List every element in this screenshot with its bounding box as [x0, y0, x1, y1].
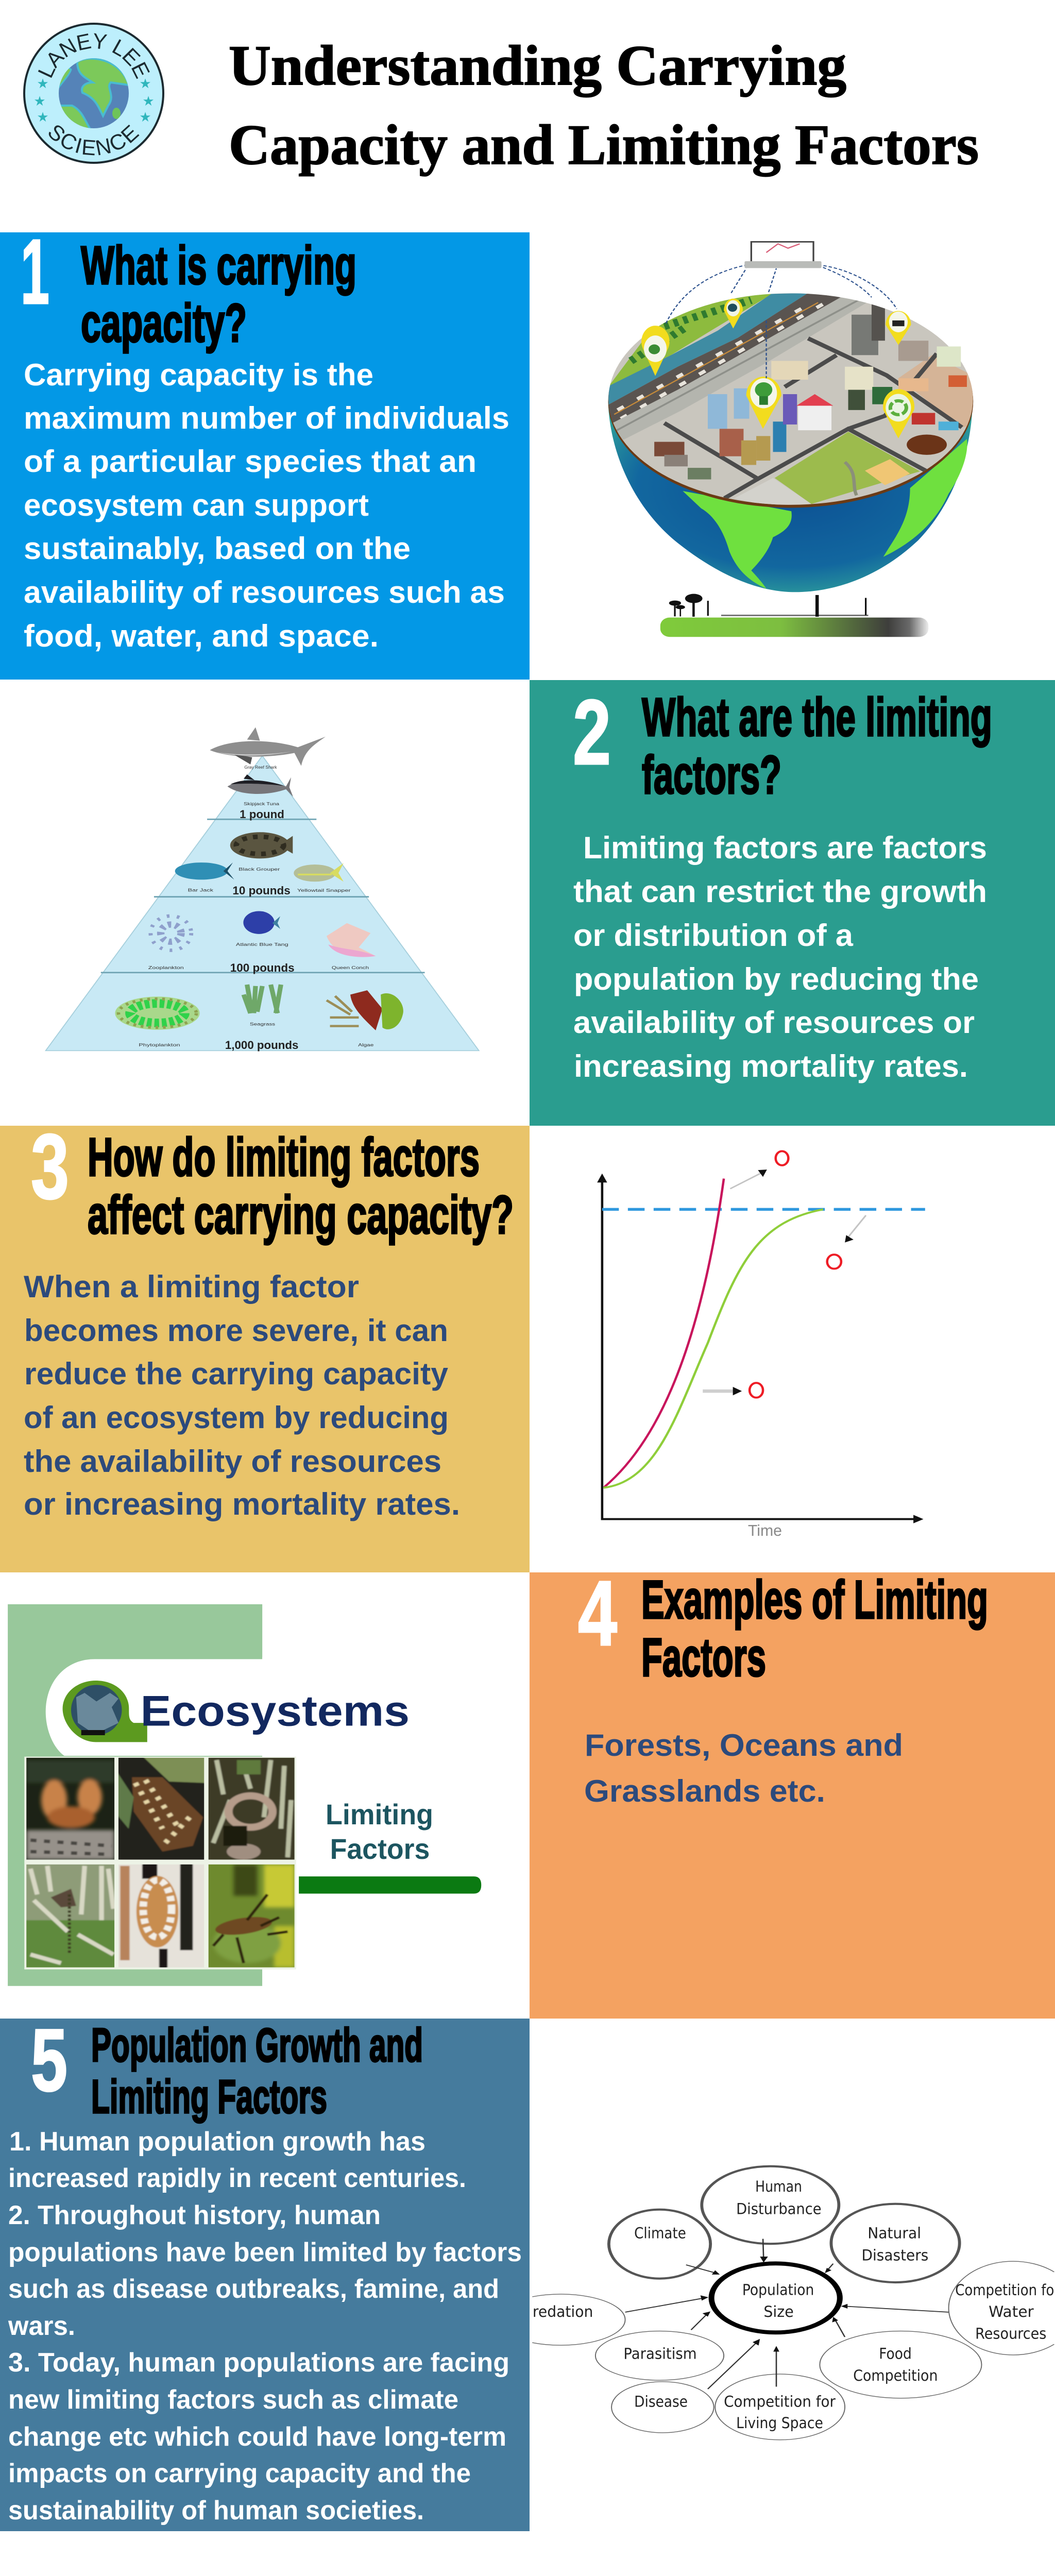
grouper	[230, 832, 293, 858]
pyramid body	[46, 756, 479, 1050]
diagram labels: Competition	[853, 2367, 938, 2384]
number 4: 4	[578, 1562, 617, 1665]
diagram labels: Disasters	[862, 2247, 928, 2264]
body text 3	[24, 1269, 460, 1521]
body text 1: availability of resources such as	[24, 575, 505, 609]
green river bank	[610, 294, 772, 385]
right beige zone	[898, 355, 979, 428]
photo: grasshopper on leaf	[207, 1862, 296, 1970]
illustration: earth with city on top	[598, 242, 979, 637]
body text 2: availability of resources or	[573, 1005, 975, 1040]
highway	[608, 293, 843, 424]
logo stars: ★	[37, 76, 49, 92]
heading 3	[88, 1127, 514, 1245]
body text 2	[573, 831, 987, 1083]
pyramid labels: Black Grouper	[239, 867, 280, 872]
panel 4: examples of limiting factors	[530, 1562, 1055, 2019]
number 1: 1	[21, 220, 49, 323]
diagram labels: Disturbance	[736, 2200, 822, 2218]
body text 1: maximum number of individuals	[24, 401, 509, 435]
logo stars: ★	[142, 94, 155, 109]
city disc surface	[598, 286, 979, 509]
heading 5: Limiting Factors	[91, 2071, 327, 2123]
heading 5: Population Growth and	[91, 2019, 423, 2072]
body text 4	[584, 1728, 903, 1808]
diagram labels: Food	[879, 2345, 912, 2363]
heading 4: Factors	[641, 1628, 766, 1688]
photo: red squirrels	[24, 1756, 117, 1861]
diagram labels: Water	[989, 2303, 1034, 2320]
body text 4: Forests, Oceans and	[585, 1728, 903, 1762]
body text 5: populations have been limited by factors	[8, 2238, 522, 2267]
pyramid labels: 100 pounds	[230, 962, 295, 975]
algae	[327, 990, 403, 1030]
illustration: ecosystems limiting factors slide	[8, 1604, 481, 1989]
diagram labels: Living Space	[736, 2415, 823, 2432]
chart: population growth curves with carrying capacity line	[597, 1151, 925, 1539]
diagram labels: redation	[533, 2303, 593, 2320]
body text 1: food, water, and space.	[24, 619, 379, 653]
slide green background	[8, 1604, 262, 1986]
ecosystem badge	[63, 1681, 147, 1742]
diagram labels: Competition for	[724, 2393, 836, 2411]
green bar	[299, 1876, 481, 1893]
axes	[602, 1179, 918, 1519]
logo globe	[57, 58, 129, 129]
photo: fritillary butterfly on white	[117, 1862, 207, 1970]
pyramid labels: 10 pounds	[232, 885, 291, 897]
pyramid labels: Algae	[358, 1043, 373, 1047]
title: Understanding Carrying	[229, 34, 846, 97]
photo: speckled butterfly	[117, 1756, 207, 1861]
panel 2: what are the limiting factors	[530, 680, 1055, 1126]
seagrass	[244, 985, 281, 1013]
elevated rail	[613, 297, 866, 440]
continents	[683, 491, 792, 589]
body text 3: or increasing mortality rates.	[24, 1487, 460, 1521]
logo stars	[33, 76, 155, 125]
body text 5: impacts on carrying capacity and the	[8, 2459, 471, 2488]
bar jack	[175, 862, 234, 879]
heading 1	[81, 235, 356, 353]
pyramid tier lines	[101, 819, 425, 973]
exponential curve	[604, 1179, 724, 1487]
pyramid labels: Phytoplankton	[139, 1043, 180, 1047]
body text 5: 3. Today, human populations are facing	[8, 2348, 509, 2378]
ground bar	[660, 618, 928, 637]
logo: Laney Lee Science badge	[23, 23, 164, 164]
body text 5: wars.	[8, 2311, 75, 2341]
body text 2: Limiting factors are factors	[583, 831, 987, 865]
river	[607, 293, 808, 405]
body text 2: that can restrict the growth	[573, 874, 987, 909]
limiting factors label	[326, 1799, 433, 1865]
arrows	[625, 2239, 948, 2389]
arrowheads	[701, 2257, 847, 2352]
body text 5: new limiting factors such as climate	[8, 2385, 458, 2415]
heading 5	[91, 2019, 423, 2123]
pyramid labels: Skipjack Tuna	[244, 802, 280, 806]
pyramid labels	[139, 765, 373, 1052]
limiting factors label: Limiting	[326, 1799, 433, 1831]
body text 5: 1. Human population growth has	[9, 2127, 426, 2157]
pyramid labels: Atlantic Blue Tang	[236, 942, 288, 947]
white cutout	[46, 1659, 338, 1756]
body text 3: the availability of resources	[24, 1444, 441, 1479]
photo: dragonfly in grass	[24, 1862, 117, 1970]
diagram labels: Human	[755, 2178, 802, 2195]
diagram: factors affecting population size	[532, 2166, 1054, 2440]
heading 4	[641, 1570, 988, 1688]
body text 1: sustainably, based on the	[24, 531, 411, 566]
body text 2: or distribution of a	[573, 918, 854, 953]
photo grid frame	[24, 1757, 296, 1970]
diagram labels: Parasitism	[623, 2345, 697, 2363]
pyramid labels: Queen Conch	[332, 965, 369, 970]
number 5: 5	[31, 2011, 67, 2110]
heading 2	[642, 687, 992, 805]
tree silhouettes	[669, 594, 868, 617]
limiting factors label: Factors	[330, 1833, 430, 1865]
zooplankton	[150, 916, 191, 950]
illustration: marine food pyramid	[46, 727, 479, 1052]
body text 5: increased rapidly in recent centuries.	[8, 2163, 466, 2193]
logo stars: ★	[37, 110, 49, 125]
dashed network links to laptop	[666, 264, 897, 378]
body text 1	[24, 358, 509, 653]
roads	[665, 338, 962, 498]
title	[229, 34, 979, 176]
photo: coiled snake	[207, 1756, 296, 1861]
logo stars: ★	[139, 110, 151, 125]
body text 5: such as disease outbreaks, famine, and	[8, 2274, 499, 2304]
body text 3: becomes more severe, it can	[24, 1313, 448, 1348]
logo text: Science: SCIENCE	[48, 125, 139, 156]
body text 5	[8, 2127, 522, 2526]
panel 3: how do limiting factors affect carrying capacity	[0, 1115, 530, 1572]
panel 5: population growth and limiting factors	[0, 2011, 530, 2531]
body text 1: Carrying capacity is the	[24, 358, 373, 392]
body text 5: change etc which could have long-term	[8, 2422, 506, 2452]
body text 1: ecosystem can support	[24, 488, 369, 522]
body text 3: When a limiting factor	[24, 1269, 359, 1304]
number 3: 3	[31, 1115, 69, 1218]
phytoplankton	[115, 996, 200, 1030]
body text 2: population by reducing the	[574, 962, 979, 996]
park	[775, 432, 920, 504]
pyramid labels: Seagrass	[250, 1022, 276, 1026]
body text 3: of an ecosystem by reducing	[24, 1400, 449, 1435]
pyramid labels: 1 pound	[240, 808, 284, 821]
number 2: 2	[573, 681, 611, 784]
heading 3: How do limiting factors	[88, 1127, 480, 1188]
heading 1: What is carrying	[81, 235, 356, 296]
body text 5: sustainability of human societies.	[8, 2496, 424, 2526]
logistic curve	[603, 1209, 823, 1488]
axis label: time: Time	[748, 1522, 782, 1539]
location pins	[641, 298, 914, 438]
callout arrows	[703, 1170, 866, 1395]
diagram labels: Natural	[867, 2225, 921, 2242]
diagram labels: Population	[742, 2281, 814, 2299]
density independent ellipses	[609, 2166, 960, 2282]
buildings	[708, 394, 727, 429]
small building at edge	[937, 346, 961, 367]
diagram labels: Climate	[634, 2225, 686, 2242]
pyramid labels: Bar Jack	[188, 888, 214, 893]
pyramid labels: Yellowtail Snapper	[297, 888, 351, 893]
pyramid labels: 1,000 pounds	[225, 1039, 298, 1052]
logo text: Laney Lee: LANEY LEE	[38, 33, 150, 79]
heading 1: capacity?	[81, 293, 247, 353]
queen conch	[327, 923, 376, 957]
density dependent ellipses	[532, 2261, 1054, 2440]
pyramid labels: Gray Reef Shark	[244, 765, 277, 770]
shark	[210, 727, 326, 766]
pyramid labels: Zooplankton	[148, 965, 184, 970]
heading 2: factors?	[642, 745, 781, 805]
body text 1: of a particular species that an	[24, 444, 477, 479]
carrying capacity dashed line	[602, 1207, 925, 1212]
population size ellipse	[711, 2263, 840, 2332]
blue tang	[243, 911, 280, 934]
laptop	[744, 242, 822, 268]
earth sphere	[608, 401, 973, 592]
heading 3: affect carrying capacity?	[88, 1185, 514, 1245]
body text 4: Grasslands etc.	[584, 1774, 825, 1808]
yellowtail snapper	[294, 863, 344, 882]
diagram labels: Disease	[634, 2393, 688, 2411]
Ecosystems heading: Ecosystems	[141, 1687, 410, 1735]
diagram labels: Size	[763, 2303, 794, 2320]
diagram labels	[533, 2178, 1054, 2432]
body text 3: reduce the carrying capacity	[24, 1357, 449, 1391]
logo stars: ★	[33, 94, 46, 109]
tuna	[228, 774, 293, 796]
logo stars: ★	[139, 76, 151, 92]
red circle markers	[750, 1151, 841, 1398]
panel 1: what is carrying capacity	[0, 220, 530, 680]
title: Capacity and Limiting Factors	[229, 113, 979, 176]
city disc rim	[608, 295, 973, 507]
body text 5: 2. Throughout history, human	[8, 2200, 381, 2230]
body text 2: increasing mortality rates.	[574, 1049, 968, 1083]
